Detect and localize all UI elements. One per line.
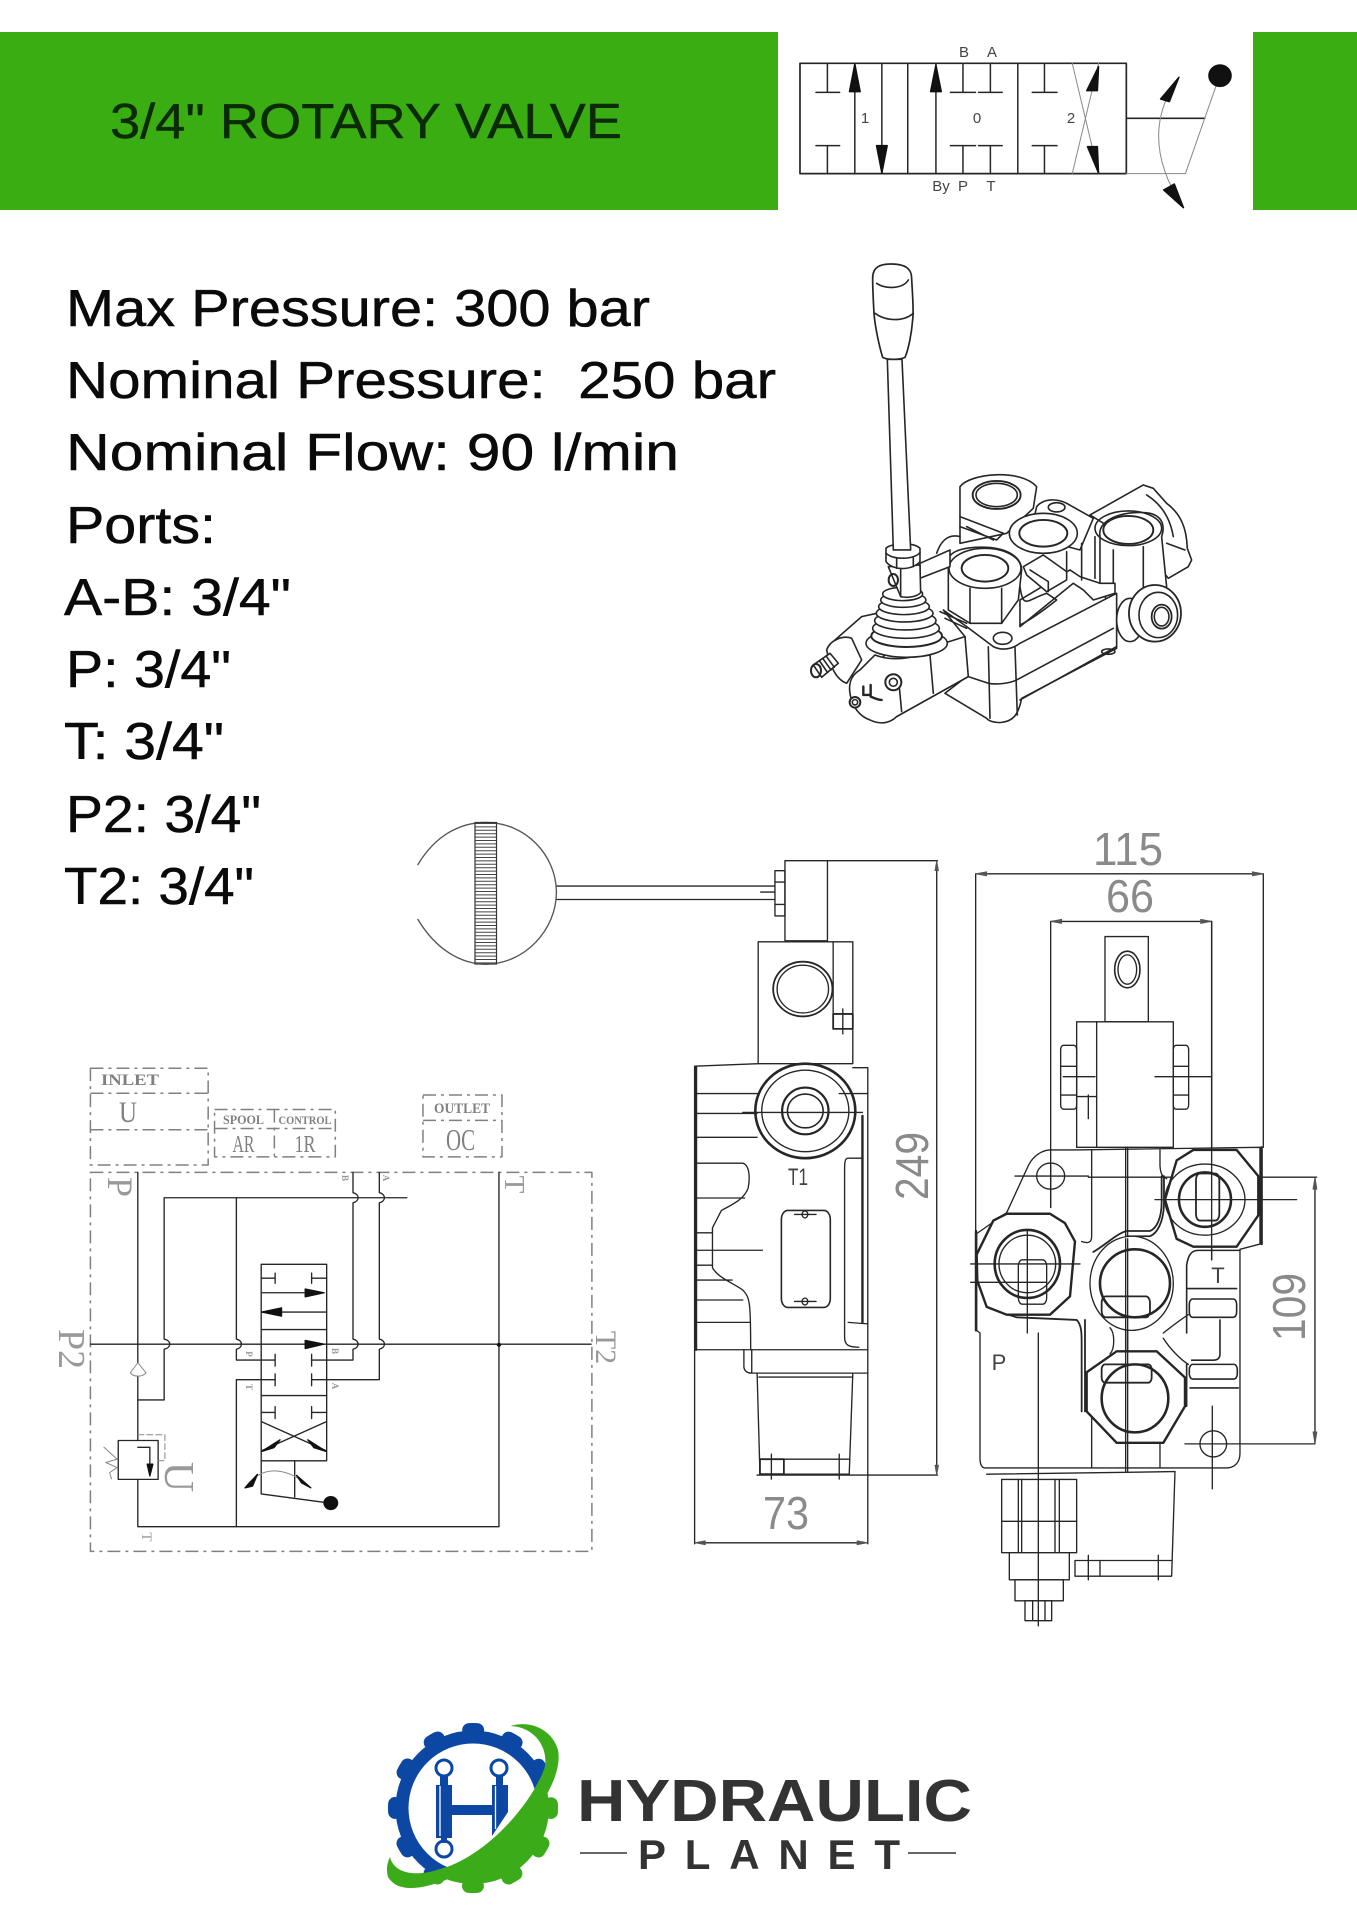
outlet box (423, 1095, 502, 1157)
dimension 109: 109 (1263, 1273, 1315, 1341)
port T (1165, 1150, 1258, 1247)
rotated port labels (50, 1175, 622, 1542)
dimension 115: 115 (1093, 823, 1163, 875)
dimension 73: 73 (763, 1487, 809, 1539)
lever nut (775, 871, 785, 916)
body outline (695, 1064, 868, 1350)
adjuster screw (835, 613, 890, 683)
port B (1087, 1351, 1185, 1443)
rotated port labels: B (330, 1348, 340, 1354)
handle grip (873, 264, 913, 359)
rotated port labels: B (340, 1175, 350, 1181)
rotated port labels: P (100, 1177, 140, 1197)
valve symbol labels: B (959, 44, 969, 61)
middle port (1009, 513, 1077, 553)
front view drawing (971, 823, 1317, 1626)
label P: P (992, 1350, 1006, 1375)
specifications text block: A-B: 3/4" (64, 569, 291, 627)
adjuster stack (1002, 1479, 1077, 1553)
logo swoosh (387, 1724, 559, 1888)
header green bar left (0, 32, 778, 210)
dimension lines (976, 874, 1317, 1444)
side slot (845, 1158, 868, 1347)
mounting holes (1037, 1163, 1065, 1189)
valve symbol labels: 1 (861, 110, 869, 127)
valve symbol labels: 0 (973, 110, 981, 127)
body outline (977, 1147, 1260, 1468)
valve symbol labels: 2 (1067, 110, 1075, 127)
rotated port labels: T (138, 1532, 154, 1542)
relief valve (118, 1441, 158, 1479)
collar (886, 544, 920, 569)
upper housing (785, 861, 827, 941)
rotated port labels: A (381, 1175, 391, 1182)
inlet box (90, 1068, 208, 1165)
isometric valve drawing (811, 264, 1192, 723)
right channels (1187, 1250, 1240, 1406)
logo wordmark: HYDRAULIC (577, 1768, 972, 1834)
circuit header labels: 1R (294, 1132, 316, 1158)
rear right port (1100, 512, 1167, 613)
dimension 249 lines (757, 861, 937, 1475)
specifications text block: Ports: (66, 497, 216, 555)
specifications text block: Nominal Pressure: 250 bar (66, 352, 776, 410)
inspection window (781, 1210, 830, 1307)
rotated port labels: P (244, 1351, 254, 1357)
rotated port labels: T (244, 1384, 254, 1390)
circuit header labels: INLET (101, 1072, 159, 1089)
valve symbol labels: A (987, 44, 997, 61)
rotated port labels: T2 (589, 1331, 622, 1364)
hydraulic circuit diagram (50, 1068, 622, 1551)
lower flange and taper (744, 1350, 868, 1474)
specifications text block: Nominal Flow: 90 l/min (66, 424, 679, 482)
body hatching (695, 1094, 762, 1350)
front port (948, 547, 1022, 623)
title: 3/4" ROTARY VALVE (110, 95, 622, 149)
valve symbol labels: By (932, 178, 950, 195)
check valve (130, 1363, 146, 1376)
end cap block (850, 637, 968, 723)
specifications text block: T: 3/4" (64, 713, 224, 771)
circuit header labels: SPOOL (223, 1112, 264, 1127)
side view drawing (418, 822, 939, 1545)
rotated port labels: T (498, 1176, 530, 1194)
rear port (960, 475, 1037, 543)
lever rod (557, 886, 777, 900)
main body (943, 593, 1117, 723)
manual lever symbol (261, 1461, 330, 1503)
rotated port labels: P2 (50, 1329, 92, 1369)
circuit header labels: OC (446, 1122, 475, 1157)
lever plate (1105, 937, 1148, 1022)
directional valve (261, 1264, 327, 1461)
circuit header labels: OUTLET (434, 1101, 490, 1117)
base line (987, 1472, 1175, 1474)
lower housing (1075, 1472, 1175, 1576)
logo hydraulic H (436, 1760, 508, 1857)
centre block (1023, 555, 1067, 592)
label T: T (1211, 1263, 1225, 1288)
side boss (1117, 598, 1143, 642)
port T1 (755, 1064, 855, 1158)
specifications text block: T2: 3/4" (64, 858, 254, 916)
valve symbol in header (800, 44, 1231, 208)
dimension 249: 249 (886, 1132, 938, 1200)
circuit lines (90, 1172, 591, 1527)
specifications text block: P2: 3/4" (66, 786, 261, 844)
rotated port labels: U (155, 1462, 201, 1492)
logo tagline: PLANET (638, 1831, 900, 1878)
lever stem (888, 565, 921, 597)
header green bar right (1253, 32, 1357, 210)
valve symbol labels: P (958, 178, 968, 195)
bracket block (1077, 1022, 1173, 1147)
label T1: T1 (788, 1164, 808, 1191)
port A (1090, 1236, 1173, 1330)
spool and control box (215, 1110, 335, 1157)
logo tagline rules (580, 1852, 956, 1854)
logo gear green part (434, 1770, 558, 1893)
specifications text block: P: 3/4" (66, 641, 231, 699)
outer channels (1000, 1176, 1164, 1411)
circuit header labels (101, 1072, 490, 1158)
valve symbol labels: T (986, 178, 996, 195)
dimension 66: 66 (1106, 870, 1154, 922)
rear flange (1090, 485, 1192, 578)
circuit header labels: U (119, 1096, 137, 1129)
lever rod (887, 359, 911, 550)
dimension 73 lines (695, 1350, 868, 1544)
circuit header labels: CONTROL (278, 1113, 332, 1127)
specifications text block: Max Pressure: 300 bar (66, 280, 650, 338)
rotated port labels: A (330, 1383, 340, 1390)
outer dashed boundary (90, 1172, 592, 1551)
lever knob (418, 822, 556, 964)
link arm (920, 550, 950, 578)
valve symbol labels (861, 44, 1075, 195)
circuit header labels: AR (232, 1132, 254, 1158)
logo gear blue part (395, 1730, 551, 1886)
logo (387, 1724, 972, 1888)
knurled band (475, 822, 496, 964)
header banner (0, 32, 1357, 210)
specifications text block (64, 280, 776, 916)
rubber boot (866, 629, 947, 657)
port P (977, 1214, 1075, 1315)
